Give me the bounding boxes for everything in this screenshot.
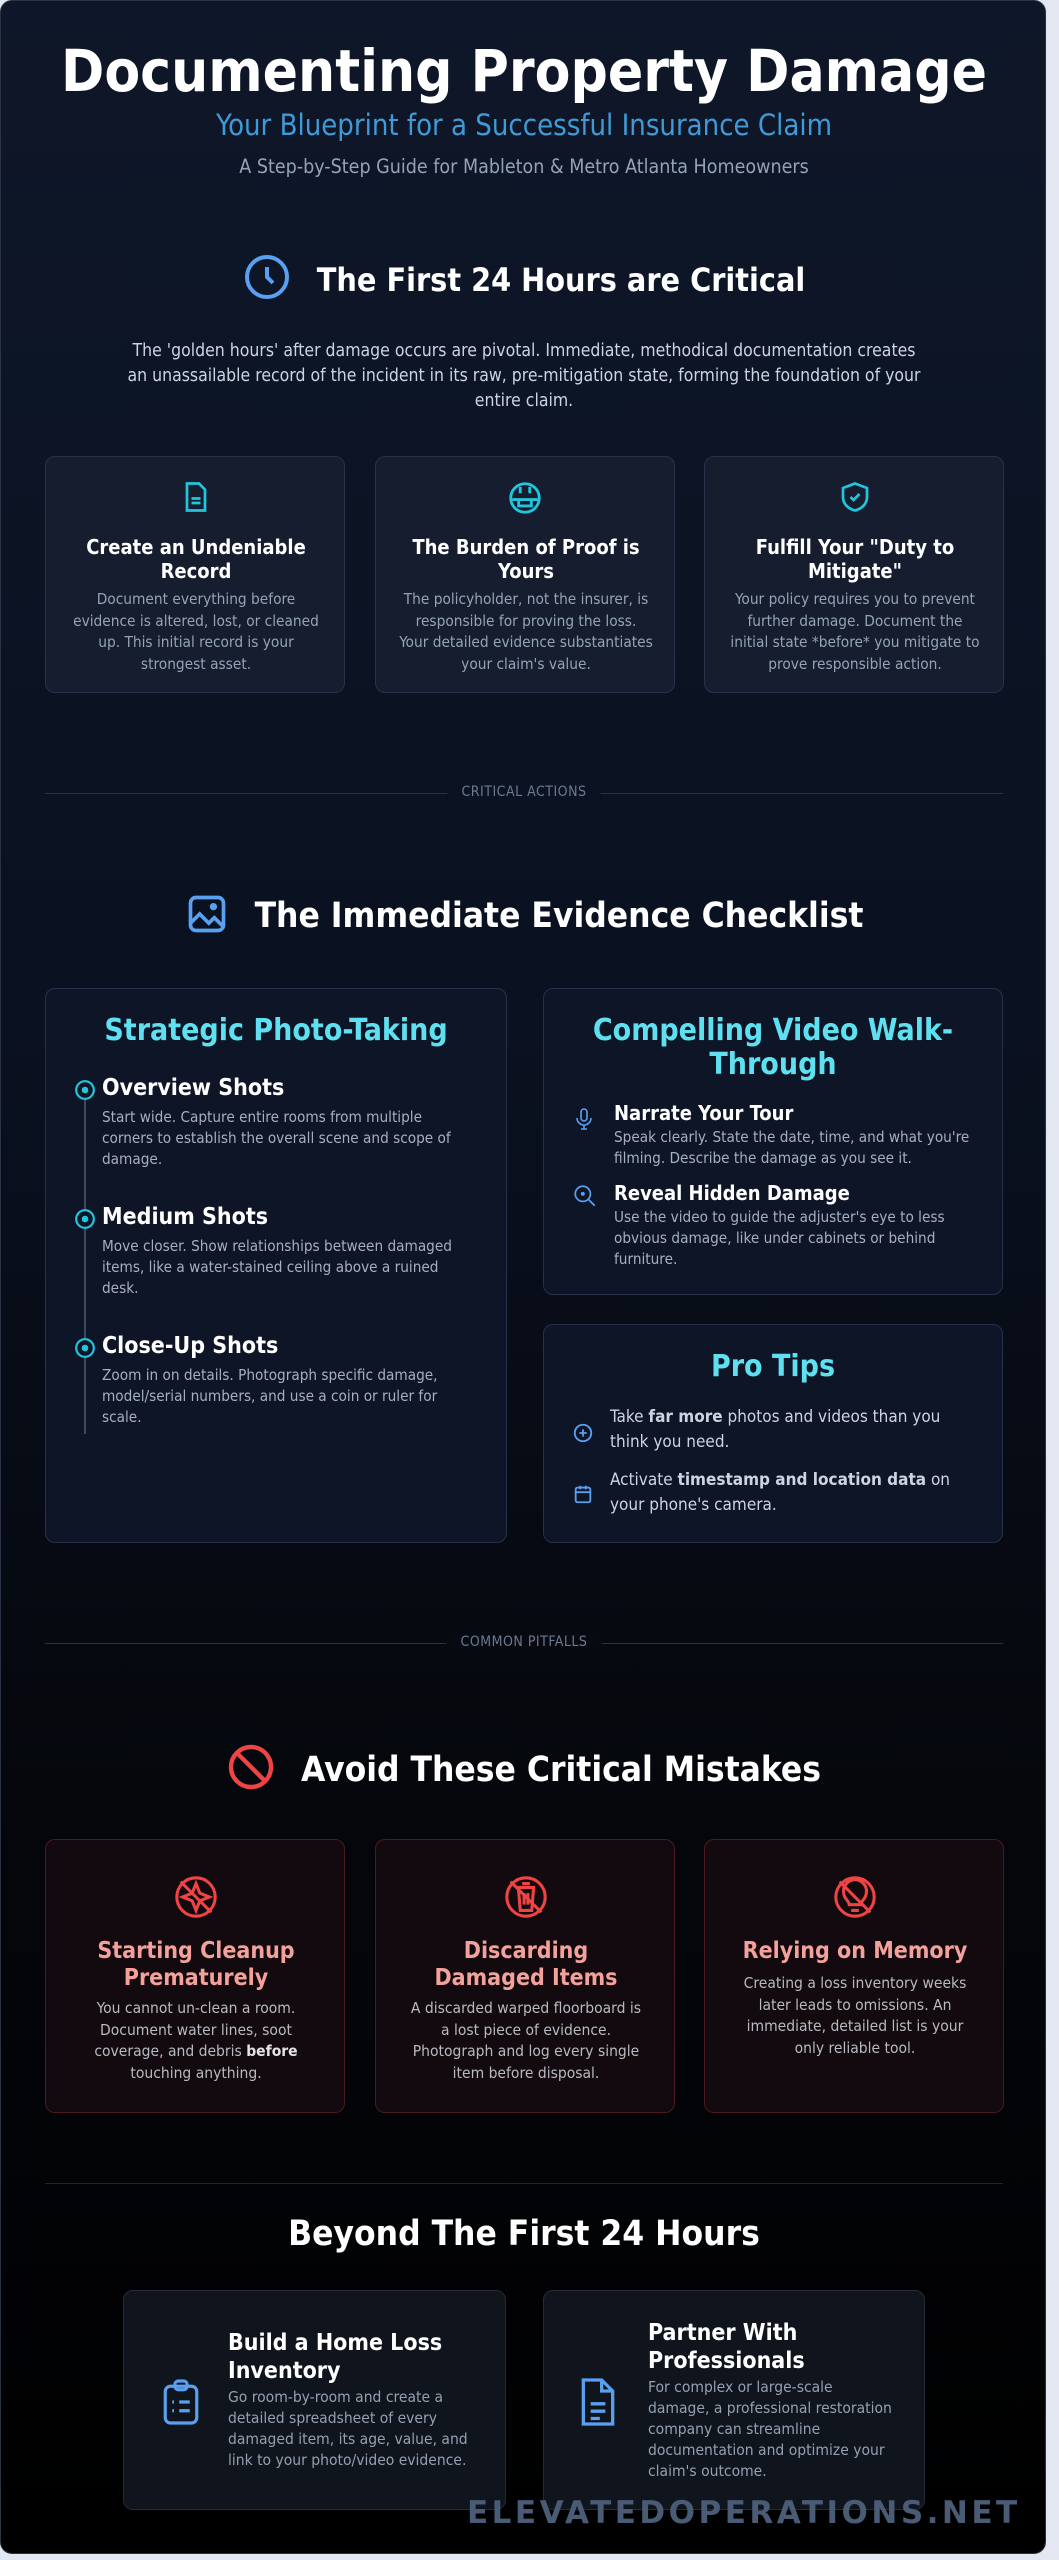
text: COMMON PITFALLS	[461, 1634, 587, 1650]
item: narrate: Speak clearly. State the date, time, and what you're filming. Describe the damage as you see it.	[614, 1128, 969, 1167]
title: Documenting Property Damage	[61, 37, 987, 105]
panel: video walk-through: Through	[709, 1047, 837, 1082]
red card: cleanup	[45, 1839, 345, 2113]
panel: pro tips: Pro Tips	[711, 1349, 835, 1384]
panel: video walk-through: Compelling Video Walk-	[593, 1013, 953, 1048]
icon: clipboard	[164, 2379, 198, 2425]
red card: cleanup: You cannot un-clean a room. Document water lines, soot coverage, and debris before touching anything.	[94, 1999, 298, 2082]
card: partner with professionals: damage, a professional restoration company can streamline documentation and optimize your claim's outcome.	[648, 2399, 892, 2480]
item: overview	[75, 1075, 451, 1168]
icon: no sparkle	[175, 1876, 217, 1918]
panel: pro tips	[543, 1324, 1003, 1543]
red card: discarding: Damaged Items	[434, 1965, 618, 1991]
item: close-up: Zoom in on details. Photograph specific damage, model/serial numbers, and use a coin or ruler for scale.	[102, 1366, 438, 1426]
red card: discarding: A discarded warped floorboard is a lost piece of evidence. Photograph and log every single item before disposal.	[411, 1999, 641, 2082]
icon: shield check	[842, 482, 868, 512]
icon: document	[582, 2378, 614, 2426]
red card: discarding	[375, 1839, 675, 2113]
card: partner with professionals: Partner With Professionals	[648, 2320, 805, 2374]
card: home loss inventory: Build a Home Loss Inventory	[228, 2330, 442, 2384]
red card: discarding: Discarding	[464, 1938, 588, 1964]
tip: more photos: Take far more photos and videos than you think you need.	[610, 1407, 940, 1452]
item: close-up	[75, 1333, 438, 1426]
tagline: A Step-by-Step Guide for Mableton & Metro Atlanta Homeowners	[239, 155, 809, 178]
timeline line	[84, 1089, 86, 1434]
card: home loss inventory	[123, 2290, 506, 2510]
heading: beyond: Beyond The First 24 Hours	[288, 2214, 760, 2254]
icon: document	[186, 482, 206, 512]
heading: avoid mistakes: Avoid These Critical Mistakes	[301, 1750, 821, 1790]
card: duty to mitigate: initial state *before* you mitigate to prove responsible action.	[730, 633, 980, 672]
heading: evidence checklist: The Immediate Evidence Checklist	[255, 896, 863, 936]
item: medium: Medium Shots	[102, 1204, 268, 1230]
card: burden of proof	[375, 456, 675, 693]
red card: memory: Relying on Memory	[743, 1938, 967, 1964]
card: burden of proof: Your detailed evidence substantiates your claim's value.	[399, 633, 653, 672]
tip: timestamp: Activate timestamp and location data on your phone's camera.	[610, 1470, 950, 1515]
item: narrate	[576, 1101, 969, 1167]
heading: first 24 hours: The First 24 Hours are Critical	[317, 261, 805, 299]
item: medium: Move closer. Show relationships between damaged items, like a water-stained ceiling above a ruined desk.	[102, 1237, 452, 1297]
card: burden of proof: The policyholder, not the insurer, is responsible for proving the loss.	[404, 590, 648, 630]
item: overview: Overview Shots	[102, 1075, 284, 1101]
icon: no trash	[505, 1876, 547, 1918]
text: CRITICAL ACTIONS	[462, 784, 586, 800]
panel: strategic photo-taking	[45, 988, 507, 1543]
card: undeniable record: Document everything before evidence is altered, lost, or cleaned up. This initial record is your strongest asset.	[73, 590, 319, 672]
item: reveal	[574, 1181, 945, 1268]
card: home loss inventory: Go room-by-room and create a detailed spreadsheet of every damaged item, its age, value, and link to your photo/video evidence.	[228, 2388, 468, 2469]
intro paragraph: The 'golden hours' after damage occurs are pivotal. Immediate, methodical documentation creates an unassailable record of the incident in its raw, pre-mitigation state, forming the foundation of your entire claim.	[127, 341, 920, 411]
panel: strategic photo-taking: Strategic Photo-Taking	[104, 1013, 448, 1048]
subtitle: Your Blueprint for a Successful Insurance Claim	[216, 108, 832, 142]
card: duty to mitigate: Fulfill Your "Duty to Mitigate"	[756, 535, 954, 583]
card: partner with professionals	[543, 2290, 925, 2510]
card: duty to mitigate: Your policy requires you to prevent further damage. Document the	[735, 590, 975, 630]
card: duty to mitigate	[704, 456, 1004, 693]
watermark: ELEVATEDOPERATIONS.NET	[467, 2495, 1021, 2531]
card: partner with professionals: For complex or large-scale	[648, 2378, 833, 2396]
icon: helmet	[509, 482, 541, 514]
card: undeniable record: Create an Undeniable Record	[86, 535, 306, 583]
item: narrate: Narrate Your Tour	[614, 1101, 793, 1125]
item: overview: Start wide. Capture entire rooms from multiple corners to establish the overall scene and scope of damage.	[102, 1108, 451, 1168]
card: burden of proof: The Burden of Proof is Yours	[412, 535, 640, 583]
red card: cleanup: Starting Cleanup Prematurely	[97, 1938, 295, 1991]
panel: video walk-through	[543, 988, 1003, 1295]
icon: no bulb	[834, 1876, 876, 1918]
item: reveal: Use the video to guide the adjuster's eye to less obvious damage, like under cabinets or behind furniture.	[614, 1208, 945, 1268]
item: medium	[75, 1204, 452, 1297]
item: close-up: Close-Up Shots	[102, 1333, 278, 1359]
red card: memory	[704, 1839, 1004, 2113]
card: undeniable record	[45, 456, 345, 693]
item: reveal: Reveal Hidden Damage	[614, 1181, 850, 1205]
red card: memory: Creating a loss inventory weeks later leads to omissions. An immediate, detailed list is your only reliable tool.	[744, 1974, 966, 2056]
